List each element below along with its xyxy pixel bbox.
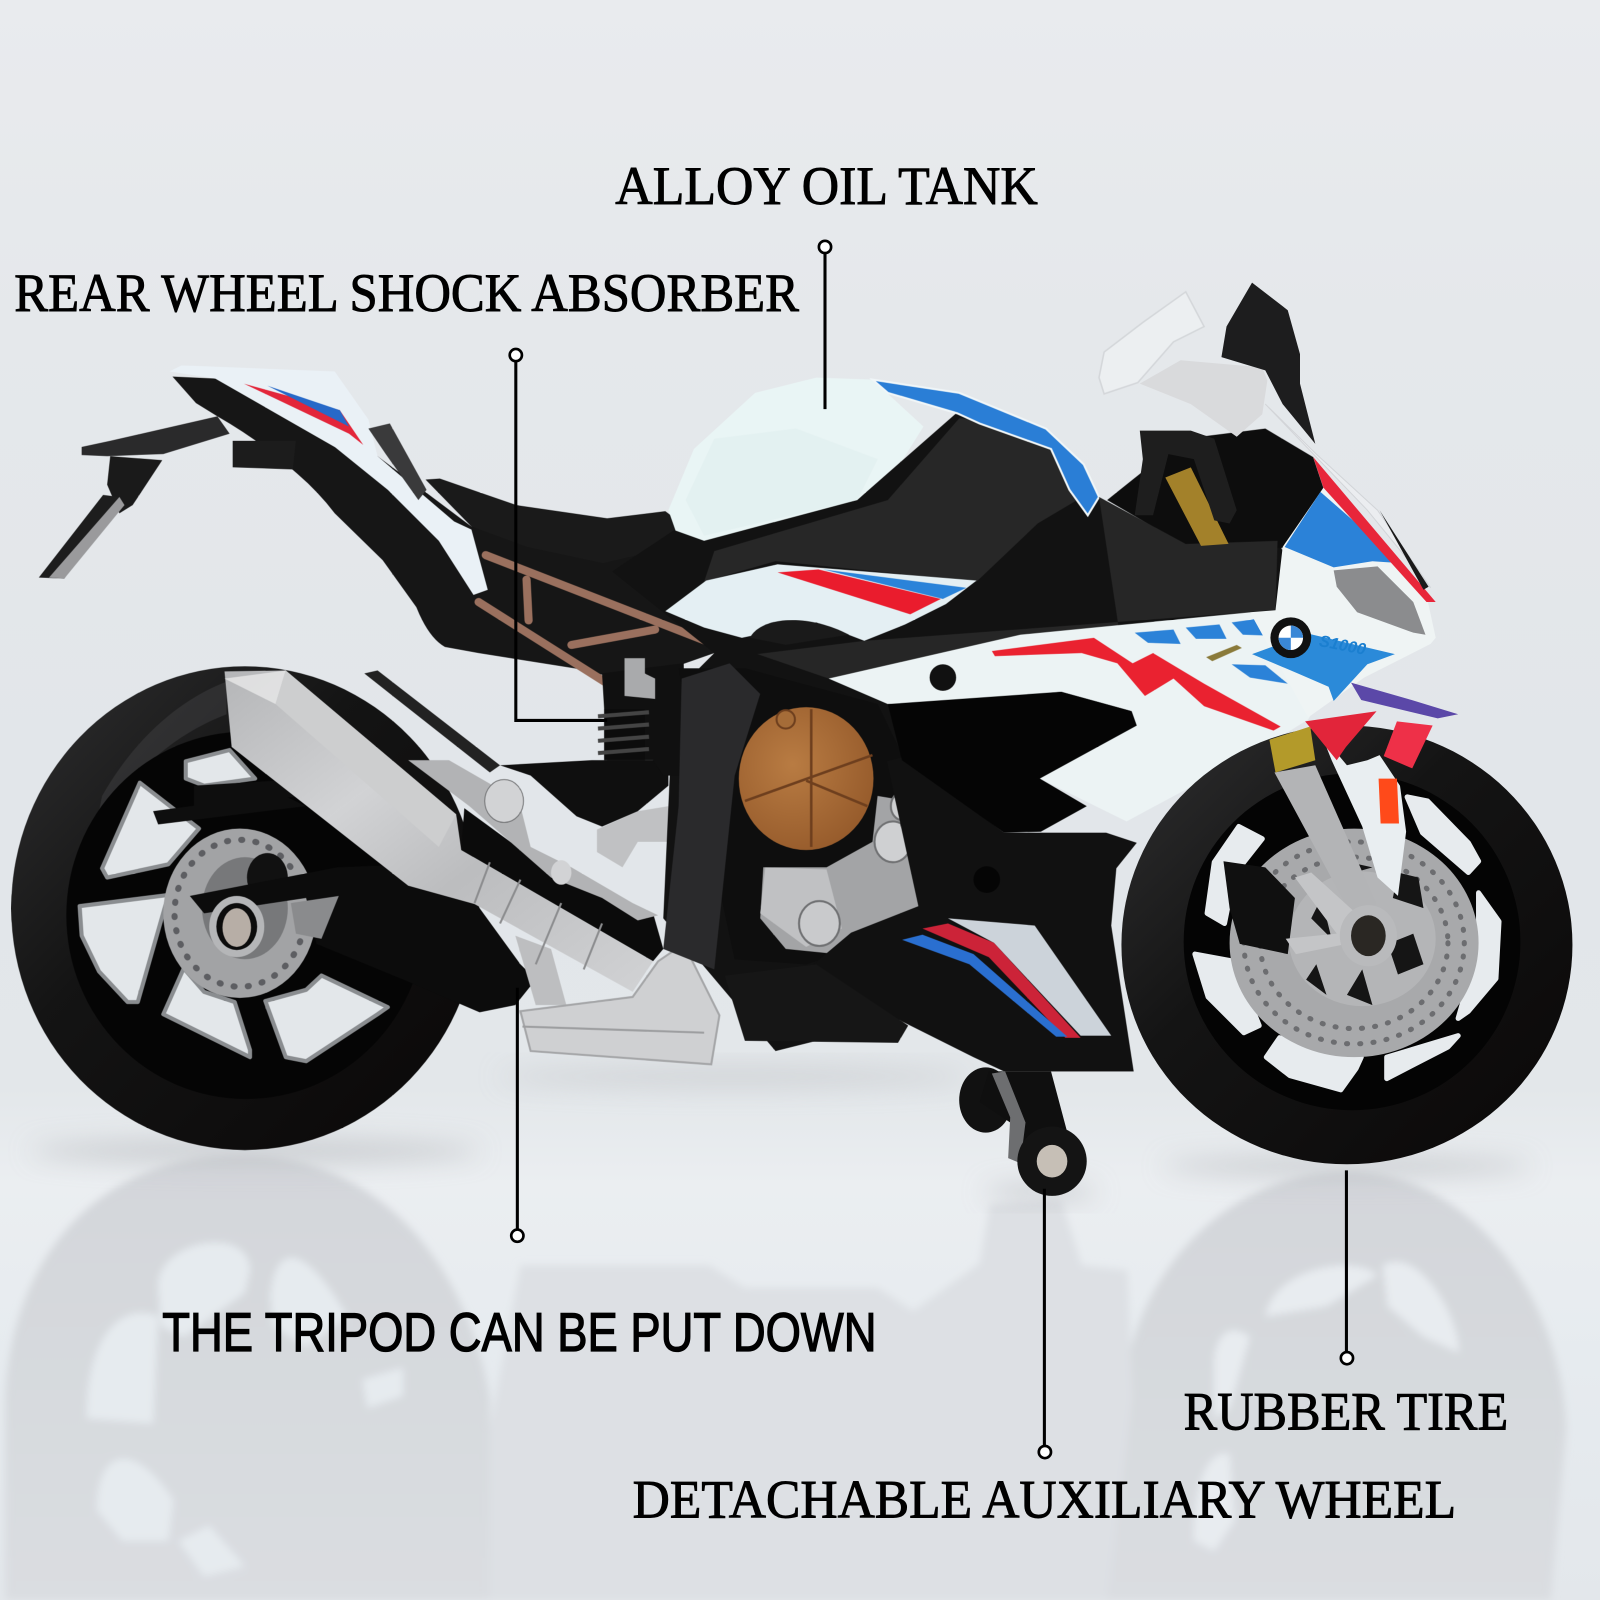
copper engine cover: [739, 707, 873, 850]
callout: rubber tire: [1184, 1170, 1508, 1442]
rear brake disc: [163, 829, 316, 998]
engine surround: [679, 668, 918, 964]
textured tank side: [704, 418, 1076, 582]
floor reflection of the motorcycle: [5, 1155, 1566, 1600]
fork guard and red fender: [1305, 711, 1433, 896]
gold fork tubes: [1165, 467, 1229, 546]
rear frame and black tail: [172, 377, 714, 682]
lower black fairing: [812, 757, 1137, 1071]
BMW logo: [1270, 617, 1311, 658]
contact shadows: [31, 1066, 1531, 1200]
footpeg black bracket: [500, 760, 668, 827]
rear shock absorber: [598, 658, 655, 760]
purple front fender: [1351, 683, 1458, 718]
silver engine block: [760, 792, 964, 954]
front brake disc: [1230, 829, 1479, 1057]
swingarm: [190, 862, 536, 1012]
swingarm silver inlet: [291, 896, 339, 939]
trellis frame: [479, 555, 708, 690]
tank side panel with stripes: [665, 564, 977, 645]
callout: rear wheel shock absorber: [14, 263, 799, 720]
black shock surround: [602, 663, 686, 776]
rear wheel: [11, 666, 479, 1150]
silver belly pan: [520, 944, 719, 1064]
rear axle: [209, 896, 264, 957]
rear hugger: [364, 670, 500, 772]
exhaust muffler: [224, 670, 653, 992]
callout: tripod: [162, 988, 877, 1363]
front wheel: [1121, 726, 1572, 1164]
motorcycle: [11, 283, 1572, 1196]
lower body under engine: [724, 964, 908, 1043]
callout: detachable auxiliary wheel: [633, 1189, 1456, 1529]
S1000 decal: S1000: [1318, 632, 1367, 659]
alloy oil tank: [668, 378, 1099, 541]
handlebar grip and lever: [1135, 431, 1237, 523]
caliper: [1223, 861, 1295, 954]
black interior behind windscreen: [1107, 429, 1323, 548]
mid body black: [612, 413, 1327, 1051]
mirror: [1221, 283, 1315, 444]
callout: alloy oil tank: [615, 156, 1038, 409]
lower white fairing: [829, 612, 1327, 833]
label: detachable auxiliary wheel: DETACHABLE AUXILIARY WHEEL: [633, 1469, 1456, 1529]
rear struts: [153, 781, 306, 824]
exhaust downpipe: [515, 936, 566, 1005]
silver swingarm bracket: [408, 760, 668, 920]
tail fairing: [169, 365, 488, 595]
seat: [426, 479, 703, 563]
label: rear wheel shock absorber: REAR WHEEL SHOCK ABSORBER: [14, 263, 799, 323]
front axle: [1340, 905, 1397, 966]
frame plate: [663, 663, 760, 969]
windscreen: [1099, 292, 1431, 588]
front fairing nose: [1250, 457, 1436, 717]
licence plate bracket: [39, 416, 296, 579]
black area behind exhaust pipe: [461, 808, 663, 961]
front fork: [1269, 727, 1377, 954]
label: alloy oil tank: ALLOY OIL TANK: [615, 156, 1038, 216]
label: tripod can be put down: THE TRIPOD CAN BE PUT DOWN: [162, 1301, 877, 1363]
label: rubber tire: RUBBER TIRE: [1184, 1382, 1508, 1442]
auxiliary wheel stand: [959, 1067, 1087, 1196]
front dark wedge: [757, 497, 1278, 679]
